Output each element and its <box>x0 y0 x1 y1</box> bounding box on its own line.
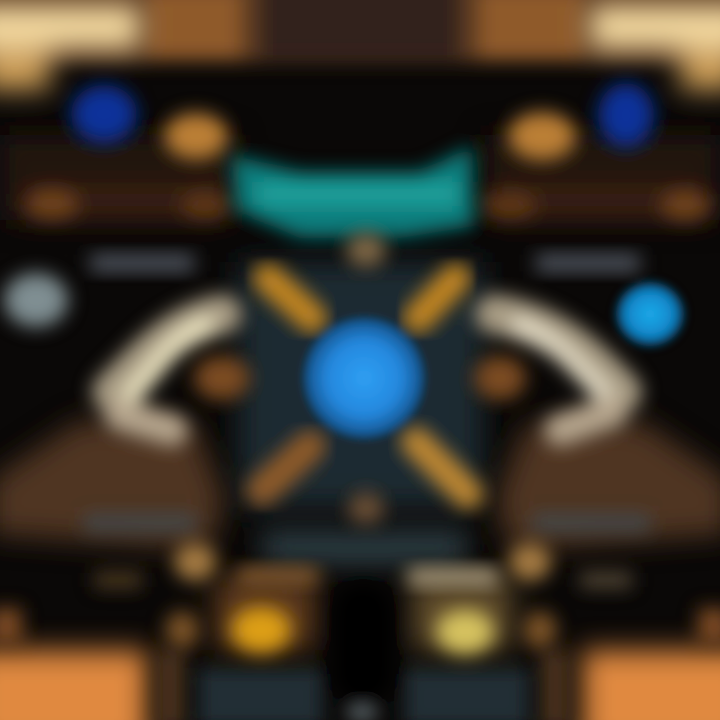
bottom node <box>348 492 384 524</box>
icon: pale yellow glow right <box>436 610 494 654</box>
title <box>232 146 474 238</box>
icon: left pale circle <box>4 273 68 327</box>
bottom connector bars <box>238 568 498 586</box>
small left amber labels <box>25 189 230 219</box>
left brown node <box>194 356 250 400</box>
small right nodes <box>509 543 557 649</box>
arrow: lower right <box>416 442 468 494</box>
icon: top right blue circle <box>598 83 654 147</box>
bottom left orange corner <box>0 650 148 720</box>
icon: top left amber badge <box>164 113 228 159</box>
top left light <box>0 6 140 90</box>
central blue orb <box>304 318 424 438</box>
right lower text <box>532 514 650 588</box>
right curved arm <box>495 314 622 430</box>
right mountain base <box>495 420 720 550</box>
bottom center marker <box>346 702 378 720</box>
top banner <box>0 0 720 62</box>
icon: top left blue circle <box>71 85 137 143</box>
bottom left amber cluster <box>215 578 315 650</box>
icon: yellow glow left <box>231 607 291 653</box>
top node <box>346 233 386 267</box>
left curved arm <box>112 314 222 430</box>
bottom center black column <box>334 584 392 702</box>
bottom right orange corner <box>582 650 720 720</box>
arrow: lower left <box>262 446 310 490</box>
bottom center column band <box>198 668 529 720</box>
small right amber labels <box>483 190 710 220</box>
left mountain base <box>0 420 225 550</box>
right heading text <box>536 254 640 272</box>
left heading text <box>90 254 194 272</box>
icon: right blue circle <box>616 282 684 346</box>
left lower text <box>84 514 196 588</box>
icon: top right amber badge <box>508 112 576 160</box>
bottom edge strips <box>0 608 720 720</box>
small left nodes <box>165 543 216 649</box>
arrow: upper left <box>268 278 312 318</box>
top right light <box>590 6 720 90</box>
arrow: upper right <box>418 278 456 318</box>
right brown node <box>474 356 526 400</box>
shelf rows <box>0 135 720 220</box>
bottom right pale cluster <box>412 578 512 650</box>
central panel <box>238 262 483 564</box>
